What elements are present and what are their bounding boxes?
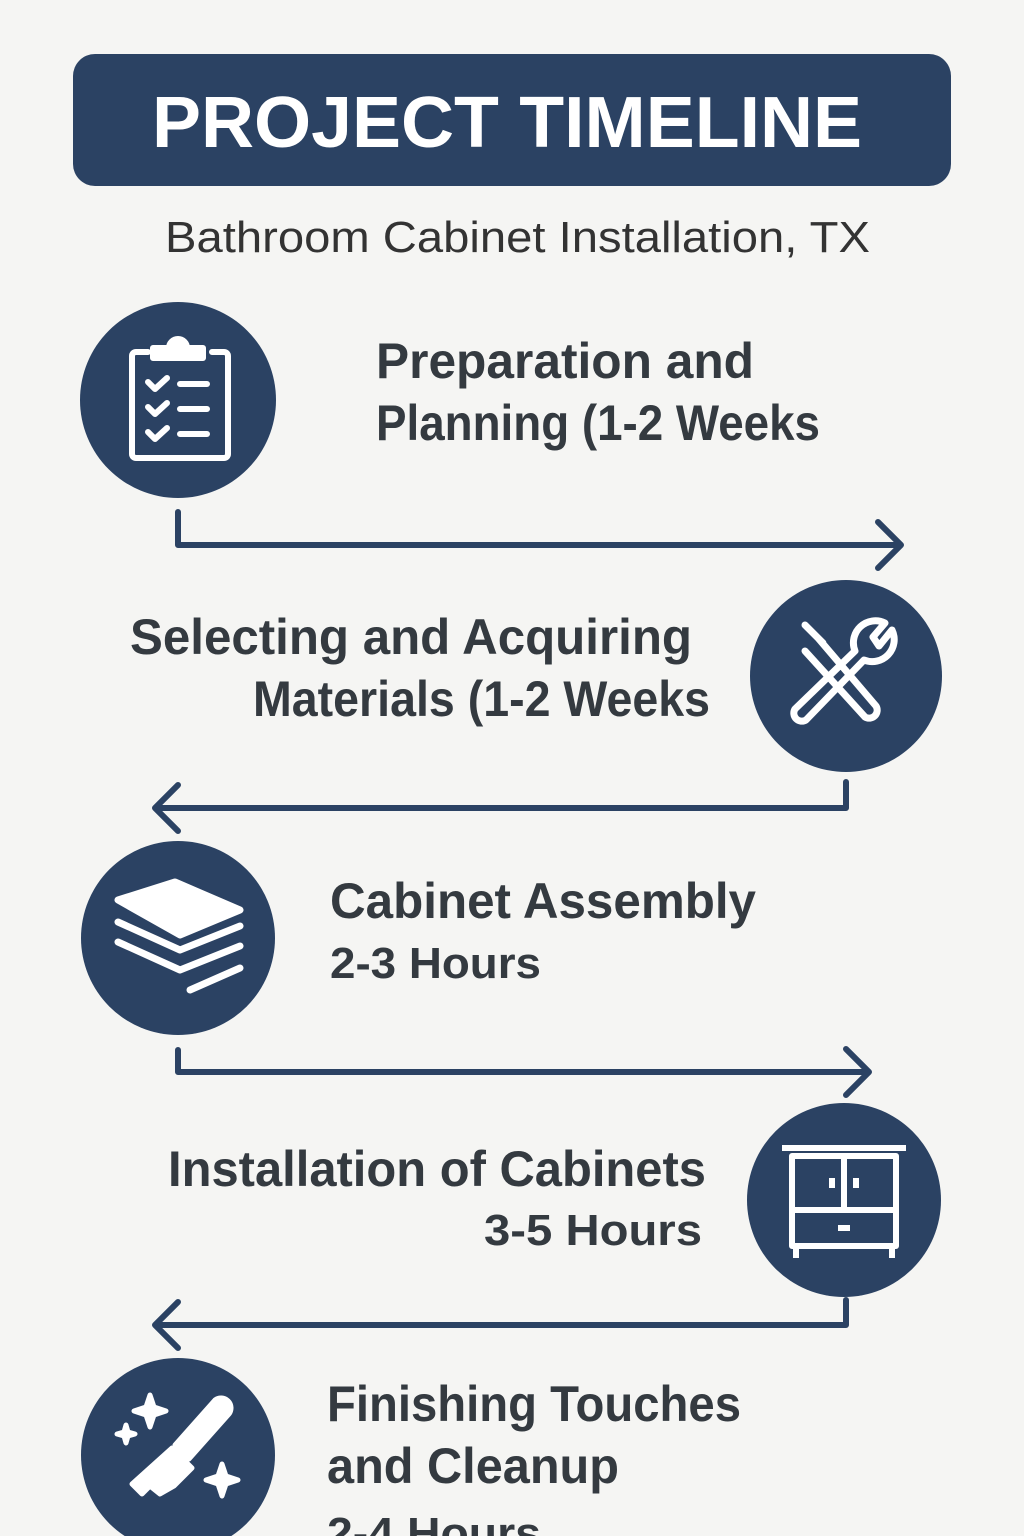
step 5 text: Finishing Touches — [327, 1376, 741, 1432]
step 4 text: 3-5 Hours — [484, 1206, 702, 1255]
arrow 4 — [155, 1300, 846, 1348]
step 1 text: Preparation and — [376, 333, 754, 389]
icon: tools — [750, 580, 942, 772]
step 2 text: Selecting and Acquiring — [130, 609, 692, 665]
step 1 text — [376, 333, 820, 451]
icon: cabinet — [747, 1103, 941, 1297]
arrow 2 — [155, 782, 846, 831]
step 2 text — [130, 609, 710, 727]
step 5 text: and Cleanup — [327, 1438, 619, 1494]
title — [73, 54, 951, 186]
step 1 text: Planning (1-2 Weeks — [376, 395, 820, 451]
subtitle: Bathroom Cabinet Installation, TX — [165, 213, 870, 262]
step 3 text: Cabinet Assembly — [330, 873, 756, 929]
arrow 1 — [178, 512, 901, 568]
icon: brush and sparkles — [81, 1358, 275, 1536]
step 2 text: Materials (1-2 Weeks — [253, 671, 710, 727]
arrow 3 — [178, 1049, 869, 1095]
step 4 text: Installation of Cabinets — [168, 1141, 706, 1197]
step 3 text: 2-3 Hours — [330, 939, 541, 988]
step 5 text — [327, 1376, 741, 1536]
step 3 text — [330, 873, 756, 988]
icon: clipboard — [80, 302, 276, 498]
icon: stacked boards — [81, 841, 275, 1035]
title: PROJECT TIMELINE — [152, 83, 862, 163]
step 4 text — [168, 1141, 706, 1255]
